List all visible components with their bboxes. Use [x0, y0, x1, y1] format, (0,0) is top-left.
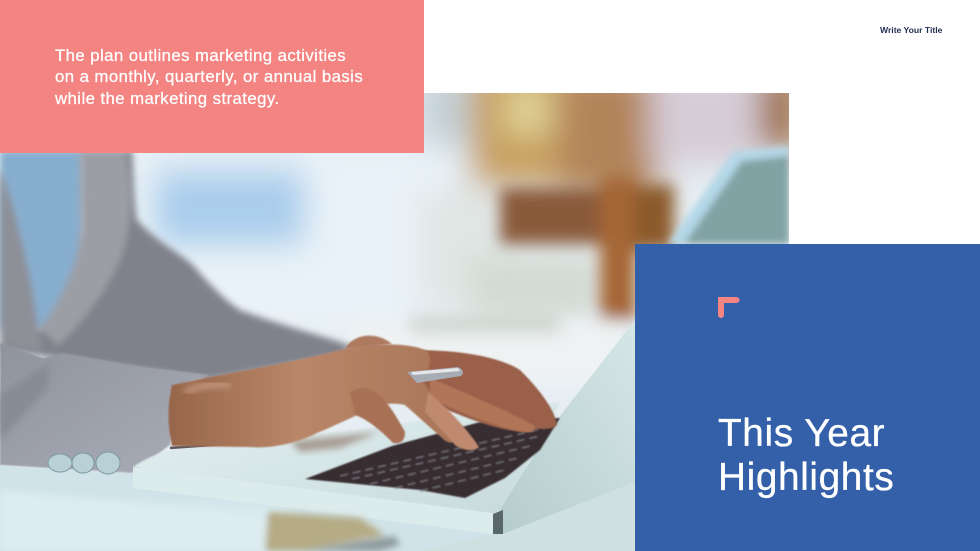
panel: coral text block — [0, 0, 424, 153]
desk — [0, 466, 635, 551]
heading — [718, 412, 894, 499]
notebook on desk — [0, 490, 400, 551]
header title label: Write Your Title — [880, 25, 942, 35]
heading: Highlights — [718, 456, 894, 499]
laptop — [133, 320, 635, 534]
intro text — [54, 46, 363, 108]
cuff buttons — [48, 452, 120, 474]
icon: coral corner bracket — [718, 297, 740, 318]
laptop screen, far corner — [668, 146, 789, 244]
photo: hands typing on a laptop — [0, 93, 789, 551]
intro text: on a monthly, quarterly, or annual basis — [55, 67, 363, 86]
hand and pen — [168, 336, 557, 450]
blurred background — [130, 60, 800, 386]
heading: This Year — [718, 412, 885, 454]
panel: blue title block — [635, 244, 980, 551]
jacket — [0, 150, 352, 473]
intro text: The plan outlines marketing activities — [55, 46, 346, 64]
intro text: while the marketing strategy. — [55, 88, 280, 108]
keyboard — [305, 418, 560, 498]
